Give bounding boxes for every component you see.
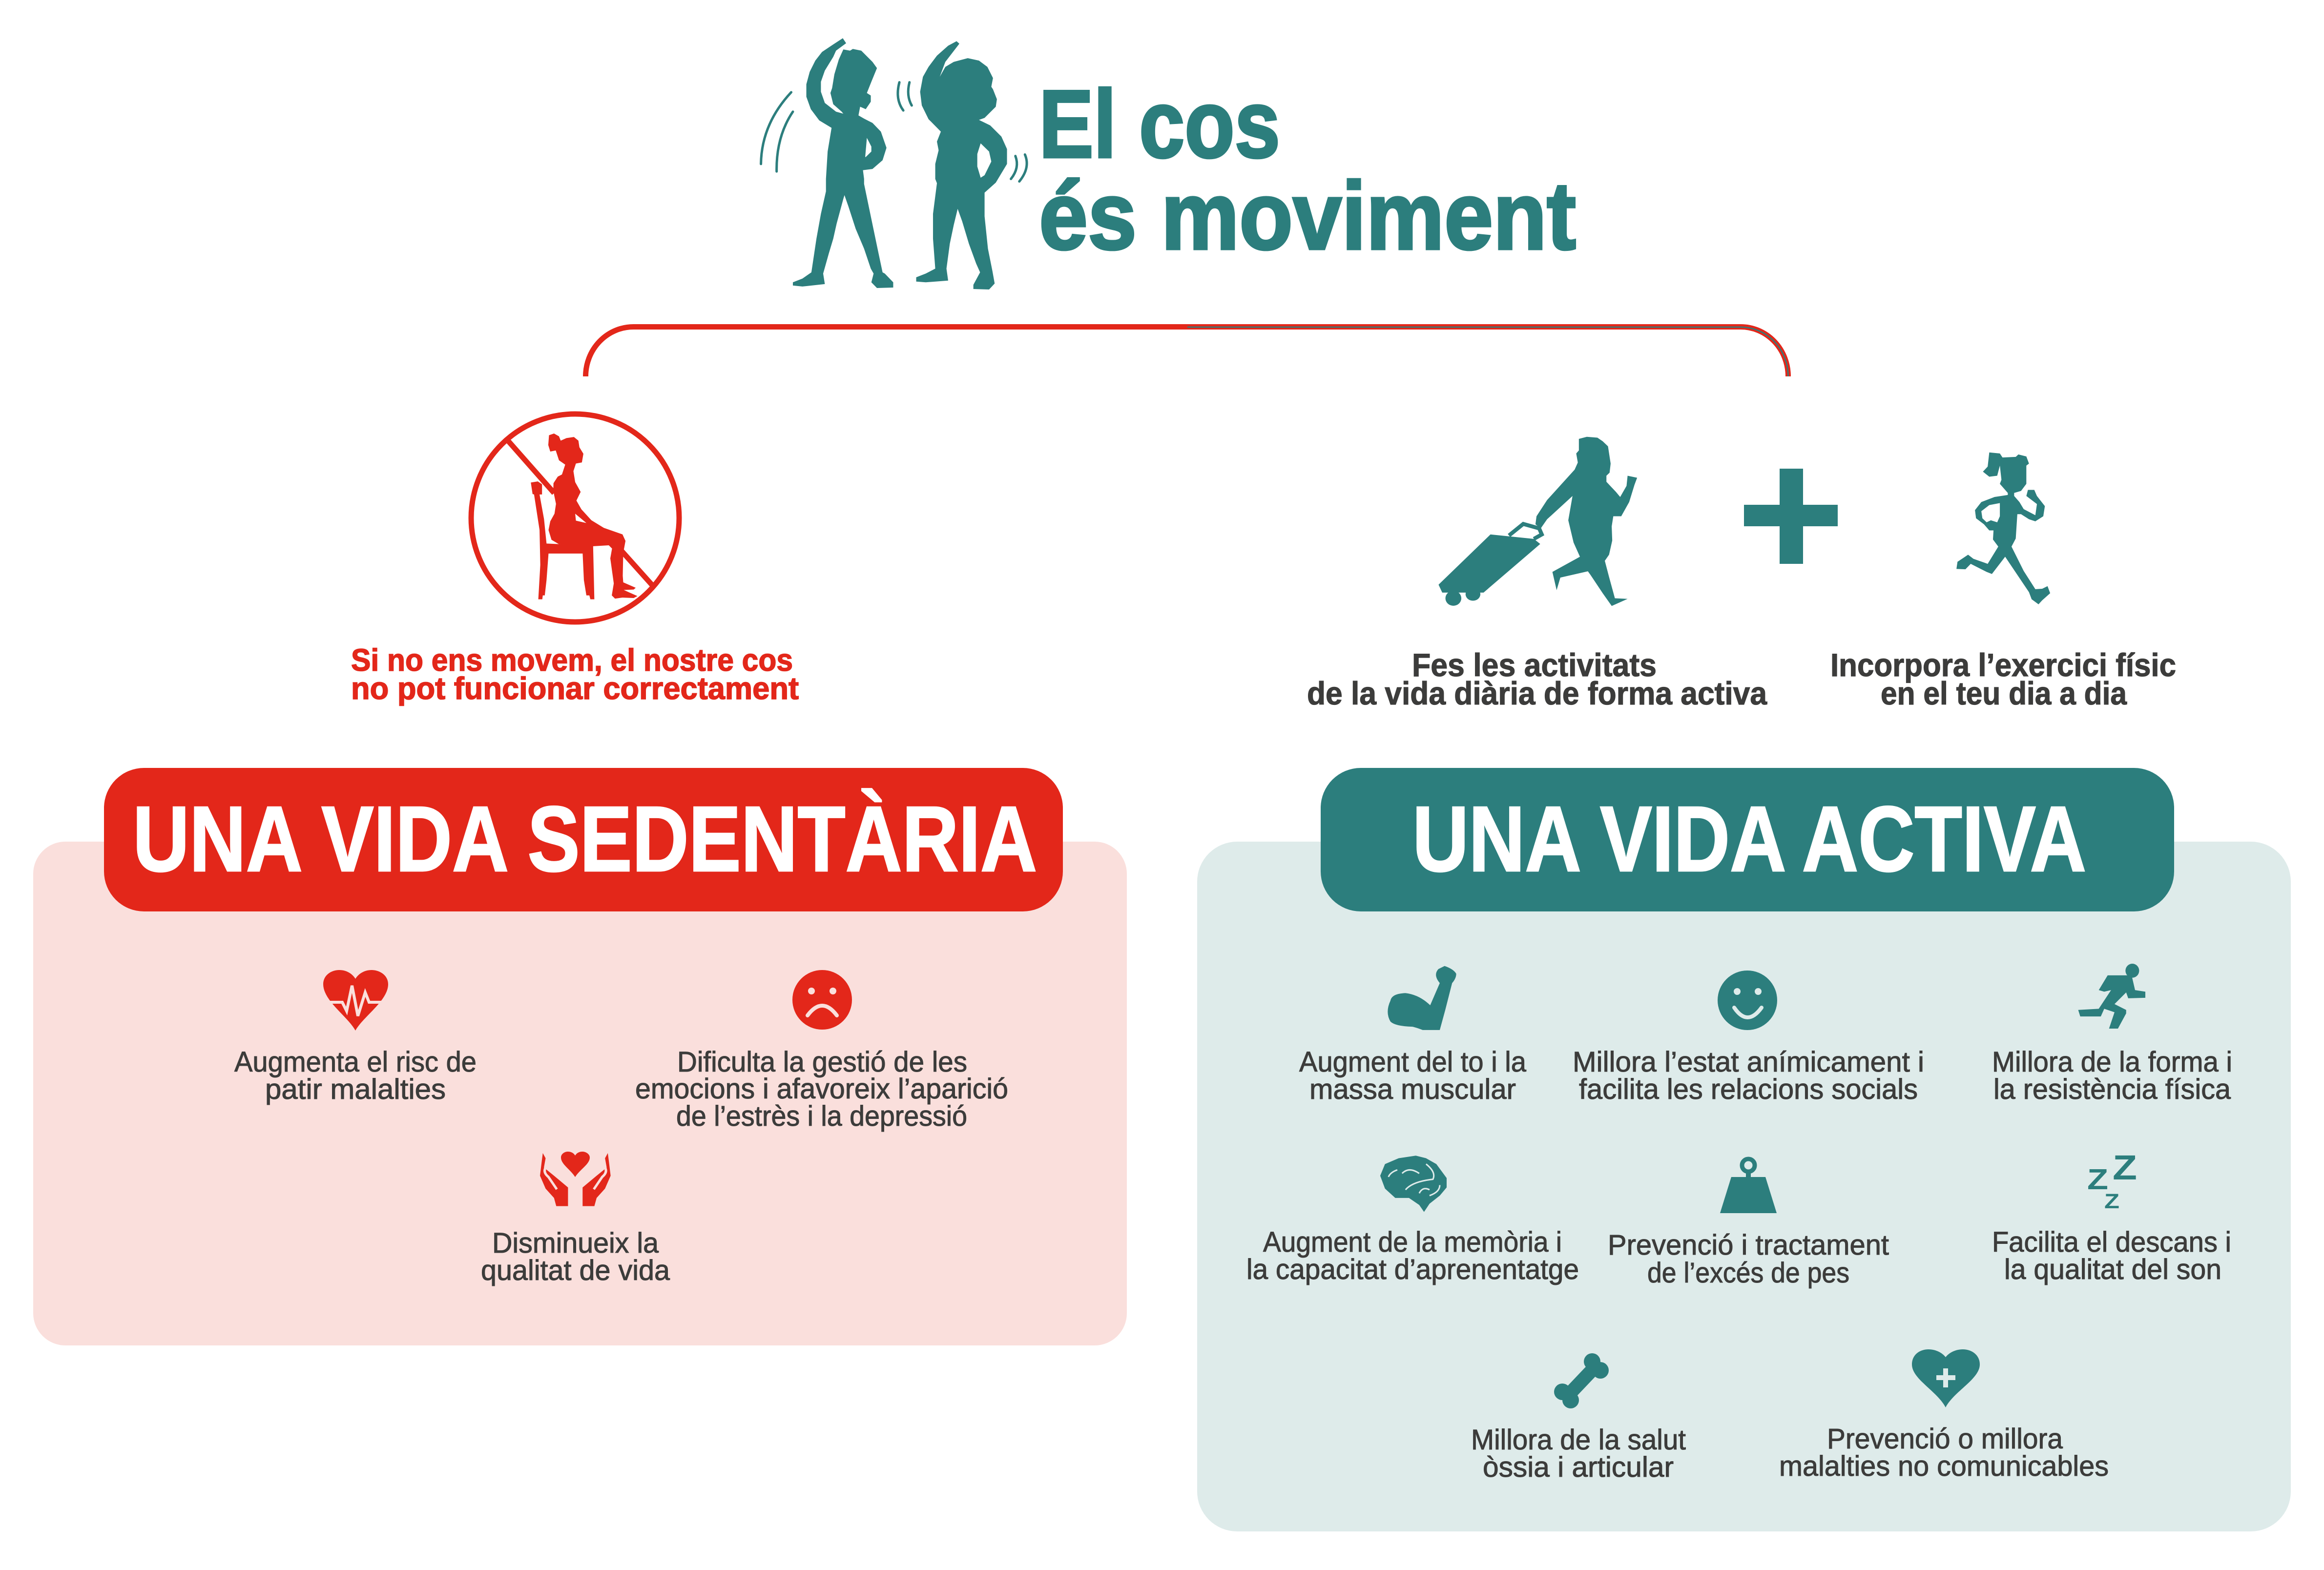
item: mood: Millora l’estat anímicament i bbox=[1573, 1046, 1924, 1078]
item: weight: de l’excés de pes bbox=[1647, 1257, 1849, 1289]
item: muscle: Augment del to i la bbox=[1299, 1046, 1527, 1078]
text: sedentary warning: Si no ens movem, el nostre cos bbox=[351, 642, 793, 678]
icon: no sitting sign bbox=[471, 414, 679, 622]
item: non-communicable diseases: Prevenció o millora bbox=[1827, 1423, 2063, 1455]
item: mood: facilita les relacions socials bbox=[1579, 1074, 1918, 1105]
text: incorporate exercise: en el teu dia a dia bbox=[1881, 675, 2127, 711]
title bbox=[1039, 70, 1576, 269]
text: incorporate exercise: Incorpora l’exercici físic bbox=[1830, 647, 2176, 683]
item: physical form: Millora de la forma i bbox=[1992, 1046, 2232, 1078]
figure: left person bbox=[793, 38, 893, 288]
text: daily activities: Fes les activitats bbox=[1412, 647, 1657, 683]
item: sleep: Z bbox=[2113, 1149, 2137, 1187]
item: muscle bbox=[1299, 966, 1527, 1105]
item: sleep: la qualitat del son bbox=[2004, 1254, 2221, 1285]
icon: person pulling suitcase bbox=[1438, 437, 1637, 606]
panel: sedentary life bbox=[33, 768, 1127, 1345]
icon: two people stretching bbox=[761, 38, 1027, 289]
item: bones: òssia i articular bbox=[1483, 1451, 1674, 1483]
heading: una vida sedentària: UNA VIDA SEDENTÀRIA bbox=[133, 787, 1037, 891]
item: quality of life: qualitat de vida bbox=[481, 1255, 670, 1286]
item: bones bbox=[1471, 1353, 1686, 1483]
item: physical form: la resistència física bbox=[1993, 1074, 2231, 1105]
bracket connector bbox=[586, 327, 1788, 376]
icon: girl running bbox=[1956, 453, 2050, 604]
item: weight: Prevenció i tractament bbox=[1608, 1229, 1889, 1261]
item: sleep: Z bbox=[2104, 1190, 2119, 1213]
text: daily activities bbox=[1307, 647, 1767, 711]
item: non-communicable diseases bbox=[1779, 1349, 2109, 1482]
item: emotions bbox=[635, 970, 1008, 1132]
panel: active life bbox=[1197, 768, 2291, 1531]
item: memory: Augment de la memòria i bbox=[1263, 1226, 1562, 1258]
item: quality of life bbox=[481, 1152, 670, 1286]
heading: una vida sedentària bbox=[104, 768, 1063, 911]
item: memory bbox=[1246, 1156, 1579, 1285]
heading: una vida activa bbox=[1321, 768, 2174, 911]
text: sedentary warning: no pot funcionar correctament bbox=[351, 671, 799, 706]
item: sleep: Z bbox=[2087, 1163, 2108, 1196]
item: bones: Millora de la salut bbox=[1471, 1424, 1686, 1456]
item: physical form bbox=[1992, 964, 2232, 1105]
item: quality of life: Disminueix la bbox=[492, 1227, 659, 1259]
item: disease risk: Augmenta el risc de bbox=[234, 1046, 477, 1078]
title: El cos bbox=[1039, 70, 1280, 178]
item: mood bbox=[1573, 971, 1924, 1105]
heading: una vida activa: UNA VIDA ACTIVA bbox=[1412, 787, 2086, 891]
item: emotions: emocions i afavoreix l’aparició bbox=[635, 1073, 1008, 1105]
text: sedentary warning bbox=[351, 642, 799, 706]
item: sleep: Facilita el descans i bbox=[1992, 1226, 2231, 1258]
item: non-communicable diseases: malalties no comunicables bbox=[1779, 1450, 2109, 1482]
title: és moviment bbox=[1039, 162, 1576, 269]
figure: right person bbox=[916, 41, 1007, 289]
item: emotions: Dificulta la gestió de les bbox=[677, 1046, 967, 1078]
item: weight bbox=[1608, 1159, 1889, 1289]
item: sleep bbox=[1992, 1149, 2231, 1285]
icon: plus sign bbox=[1744, 469, 1838, 564]
text: incorporate exercise bbox=[1830, 647, 2176, 711]
icon: motion lines bbox=[761, 83, 1027, 182]
item: disease risk: patir malalties bbox=[265, 1074, 446, 1105]
item: emotions: de l’estrès i la depressió bbox=[676, 1100, 967, 1132]
item: muscle: massa muscular bbox=[1309, 1074, 1516, 1105]
item: disease risk bbox=[234, 970, 477, 1105]
text: daily activities: de la vida diària de forma activa bbox=[1307, 675, 1767, 711]
item: memory: la capacitat d’aprenentatge bbox=[1246, 1254, 1579, 1285]
